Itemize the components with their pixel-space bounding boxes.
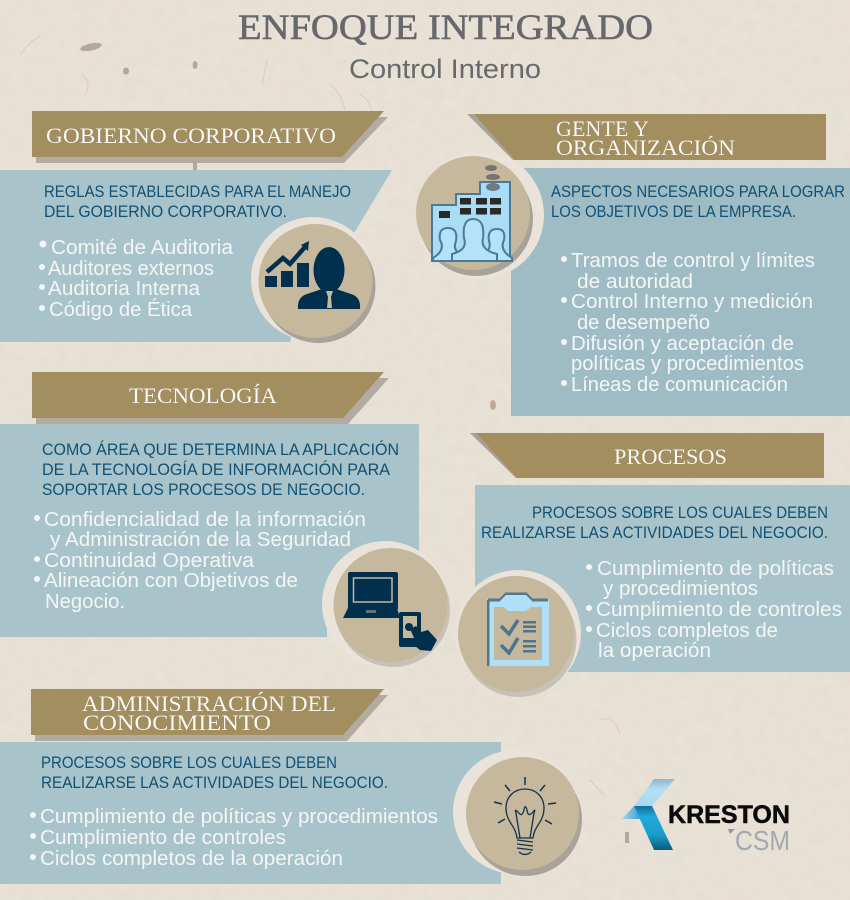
bullet list	[34, 509, 366, 613]
banner: procesos	[470, 433, 824, 478]
bullet list: Negocio.	[45, 591, 125, 613]
bullet list: y Administración de la Seguridad	[50, 529, 351, 551]
logo: Kreston CSM: KRESTON	[668, 801, 790, 829]
teal panel shape	[511, 168, 850, 416]
intro text: REALIZARSE LAS ACTIVIDADES DEL NEGOCIO.	[41, 774, 388, 792]
bullet list: Tramos de control y límites	[571, 250, 815, 272]
bullet list: Cumplimiento de políticas y procedimientos	[40, 806, 438, 828]
bullet list	[30, 806, 438, 870]
intro text: DEL GOBIERNO CORPORATIVO.	[44, 203, 287, 221]
intro text	[551, 183, 845, 221]
bullet list: de desempeño	[577, 312, 710, 334]
teal panel shape	[0, 170, 392, 342]
banner: administracion del conocimiento: ADMINISTRACIÓN DEL	[82, 691, 336, 716]
bullet list: Comité de Auditoria	[51, 237, 234, 259]
bullet list	[561, 250, 815, 396]
intro text: LOS OBJETIVOS DE LA EMPRESA.	[551, 203, 796, 221]
bullet list: la operación	[598, 640, 711, 662]
intro text	[41, 754, 388, 792]
banner: tecnologia	[32, 372, 389, 424]
logo: Kreston CSM	[622, 779, 790, 856]
icon: laptop and tablet	[322, 541, 450, 667]
icon: building with people	[416, 151, 544, 279]
intro text: DE LA TECNOLOGÍA DE INFORMACIÓN PARA	[42, 460, 390, 479]
banner: gente y organizacion: GENTE Y	[556, 116, 649, 141]
banner: gobierno corporativo: GOBIERNO CORPORATIVO	[46, 123, 336, 148]
panel: administracion del conocimiento	[0, 689, 582, 884]
intro text	[481, 504, 828, 542]
bullet list: políticas y procedimientos	[571, 353, 804, 375]
bullet list: Código de Ética	[49, 298, 193, 321]
bullet list	[586, 558, 842, 662]
bullet list: Control Interno y medición	[571, 291, 813, 313]
intro text: SOPORTAR LOS PROCESOS DE NEGOCIO.	[42, 481, 365, 499]
subtitle: Control Interno	[349, 54, 541, 84]
intro text	[44, 183, 351, 221]
panel: tecnologia	[0, 372, 450, 667]
banner: administracion del conocimiento: CONOCIMIENTO	[83, 710, 271, 735]
bullet list: Difusión y aceptación de	[571, 333, 794, 355]
panel: procesos	[455, 433, 850, 697]
bullet list: Continuidad Operativa	[44, 550, 255, 572]
bullet list: Ciclos completos de la operación	[40, 848, 343, 870]
bullet list: Cumplimiento de controles	[596, 599, 842, 621]
panel: gobierno corporativo	[0, 111, 392, 343]
bullet list: Cumplimiento de políticas	[597, 558, 834, 580]
banner: administracion del conocimiento	[31, 689, 388, 741]
bullet list: Ciclos completos de	[596, 620, 778, 642]
teal panel shape	[0, 742, 501, 884]
bullet list: Confidencialidad de la información	[44, 509, 366, 531]
teal panel shape	[475, 485, 850, 672]
banner: tecnologia: TECNOLOGÍA	[129, 383, 277, 408]
banner: gobierno corporativo	[32, 111, 388, 163]
bullet list: Cumplimiento de controles	[40, 827, 286, 849]
teal panel shape	[0, 424, 419, 637]
banner: gente y organizacion	[467, 114, 826, 160]
bullet list: Alineación con Objetivos de	[44, 570, 298, 592]
panel: gente y organizacion	[416, 114, 850, 416]
intro text: PROCESOS SOBRE LOS CUALES DEBEN	[41, 754, 337, 772]
icon: light bulb	[453, 750, 582, 876]
bullet list: Líneas de comunicación	[571, 374, 788, 396]
intro text: REALIZARSE LAS ACTIVIDADES DEL NEGOCIO.	[481, 524, 828, 542]
banner: procesos: PROCESOS	[614, 444, 727, 469]
intro text: REGLAS ESTABLECIDAS PARA EL MANEJO	[44, 183, 351, 201]
bullet list: Auditores externos	[48, 258, 214, 280]
intro text: COMO ÁREA QUE DETERMINA LA APLICACIÓN	[42, 440, 399, 459]
logo: Kreston CSM: CSM	[735, 825, 790, 856]
title: ENFOQUE INTEGRADO	[238, 7, 653, 47]
intro text	[42, 440, 399, 499]
icon: checklist clipboard	[455, 570, 581, 697]
bullet list: Auditoria Interna	[48, 278, 201, 300]
bullet list	[39, 237, 234, 321]
bullet list: de autoridad	[577, 271, 693, 293]
icon: executive with growth chart	[251, 217, 376, 343]
banner: gente y organizacion: ORGANIZACIÓN	[556, 135, 735, 160]
bullet list: y procedimientos	[603, 578, 758, 600]
intro text: PROCESOS SOBRE LOS CUALES DEBEN	[532, 504, 828, 522]
